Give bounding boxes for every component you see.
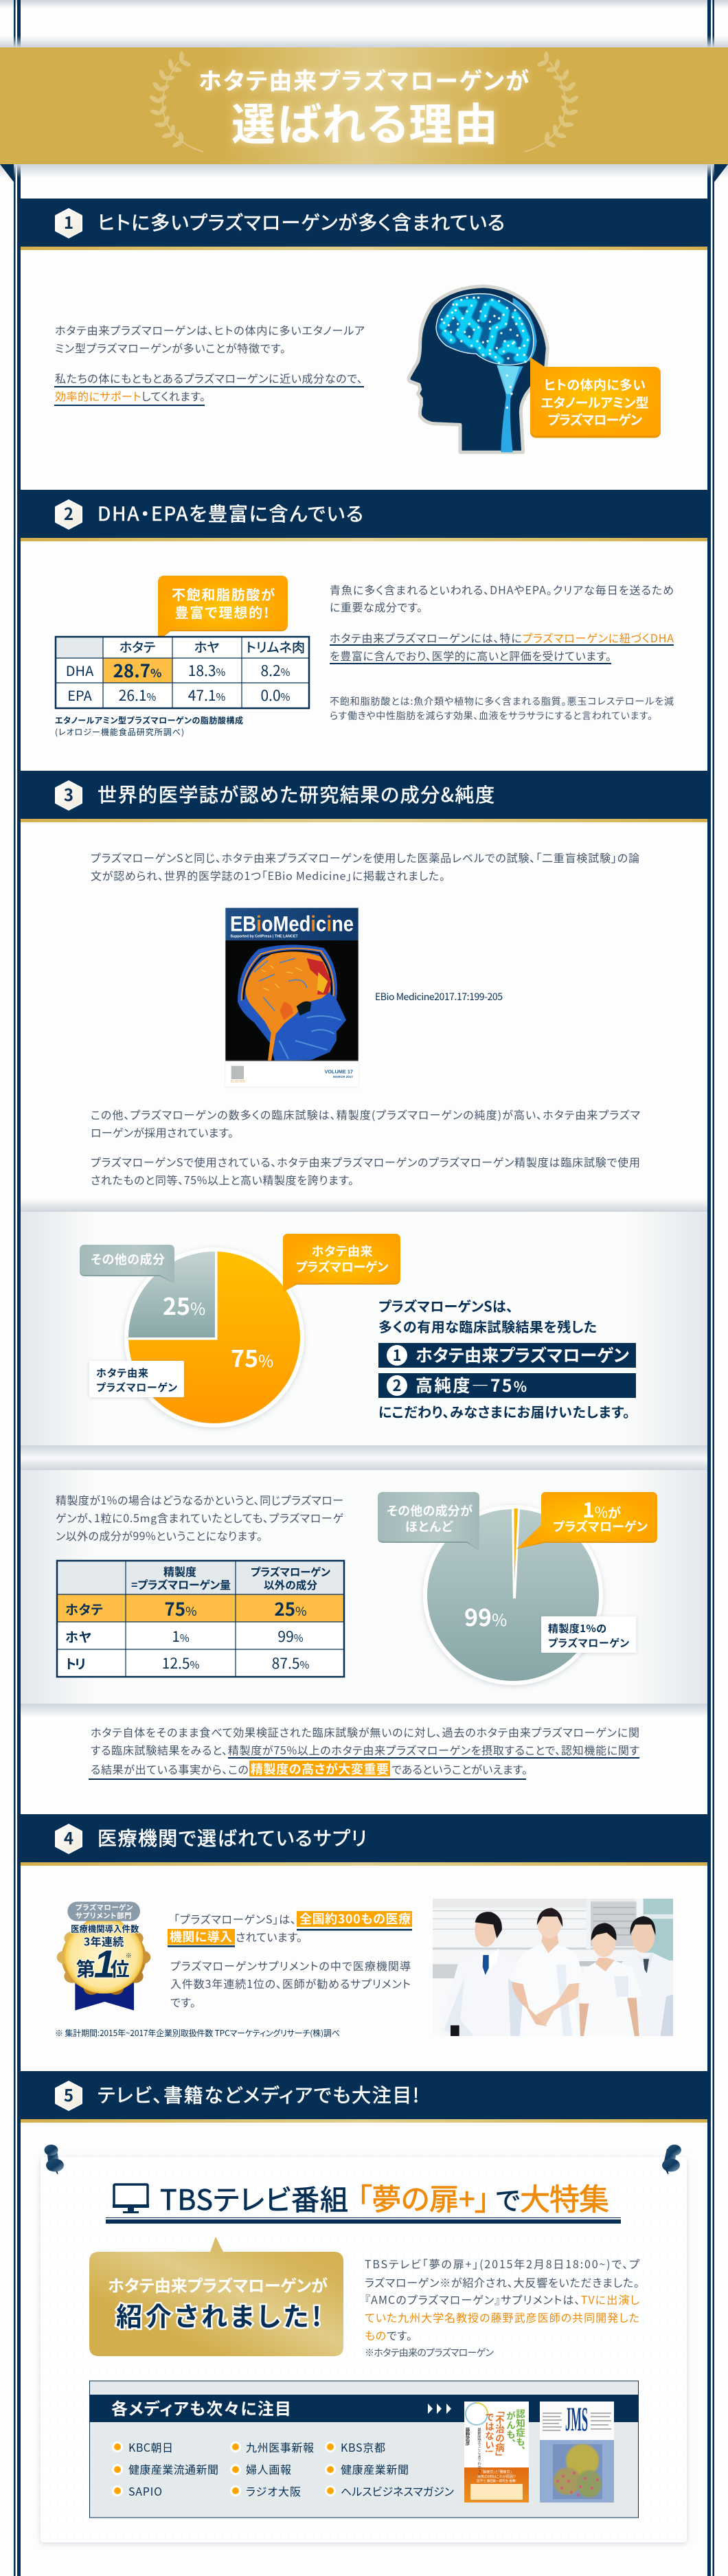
highlight: adopted by 300 institutions: [168, 1910, 412, 1947]
TV programme text: ラズマローゲン※が紹介され、大反響をいただきました。: [365, 2274, 639, 2290]
TV programme text: ていた九州大学名教授の藤野武彦医師の共同開発した: [365, 2309, 639, 2325]
section 1 text: ホタテ由来プラズマローゲンは、ヒトの体内に多いエタノールア: [55, 321, 365, 338]
media list: ラジオ大阪: [246, 2483, 301, 2499]
book cover: JMS magazine: JMS: [565, 2399, 588, 2438]
laurel left: [148, 49, 203, 152]
section 1 text: [54, 321, 365, 406]
panel text: ン以外の成分が99%ということになります。: [56, 1527, 262, 1544]
callout: mostly other ingredients: [378, 1492, 479, 1550]
callout: 1% plasmalogen: 1%が: [582, 1493, 621, 1524]
number badge 2: 2: [64, 501, 73, 525]
table: fatty acid composition: ホヤ: [194, 637, 219, 656]
table: purity by source: プラズマローゲン: [251, 1564, 330, 1579]
card heading: [106, 2175, 621, 2224]
pie chart 99/1: 99%: [464, 1599, 507, 1633]
callout: human body plasmalogen: プラズマローゲン: [547, 410, 642, 429]
callout: human body plasmalogen: エタノールアミン型: [541, 393, 648, 411]
highlight bar 1: 1: [393, 1344, 401, 1366]
badge top pill: サプリメント部門: [76, 1910, 131, 1920]
journal cover: EBioMedicine: ELSEVIER: [231, 1080, 245, 1083]
table: purity by source: =プラズマローゲン量: [131, 1576, 231, 1592]
media list: KBS京都: [341, 2439, 385, 2455]
callout: mostly other ingredients: ほとんど: [405, 1517, 453, 1535]
card heading: TBSテレビ番組: [160, 2177, 348, 2218]
label: 1% plasmalogen: [541, 1616, 636, 1653]
section 3 body text: されたものと同等、75%以上と高い精製度を誇ります。: [91, 1171, 354, 1188]
section 4 text: 「プラズマローゲンS」は、: [174, 1910, 296, 1927]
pie chart 75/25: 25%: [163, 1288, 205, 1322]
book cover: dementia: 医学士 藤田紘一郎先生 推薦!: [477, 2478, 516, 2483]
title banner: [0, 36, 728, 182]
highlight: adopted by 300 institutions: 全国約300もの医療: [299, 1910, 411, 1928]
laurel right: [525, 49, 580, 152]
table: fatty acid composition: 28.7%: [113, 657, 161, 683]
icon: pin right: [662, 2145, 681, 2174]
table: purity by source: 25%: [274, 1596, 307, 1621]
section 3 header: [21, 771, 707, 822]
callout: introduced on TV: ホタテ由来プラズマローゲンが: [108, 2272, 328, 2296]
medal badge: No.1: 第: [76, 1955, 95, 1982]
table caption: エタノールアミン型プラズマローゲンの脂肪酸構成: [55, 714, 243, 726]
number badge 5: [56, 2081, 82, 2110]
table: purity by source: [57, 1561, 344, 1677]
book cover: dementia: 藤野武彦: [464, 2427, 471, 2446]
section 2 header: [21, 490, 707, 541]
highlight: purity importance: 精製度の高さが大変重要: [251, 1760, 389, 1778]
section 1 heading: ヒトに多いプラズマローゲンが多く含まれている: [98, 208, 505, 236]
journal cover: EBioMedicine: EBioMedicine: [230, 912, 354, 936]
callout: unsaturated fatty acids: [158, 576, 288, 641]
illustration: head with glowing brain: [409, 286, 547, 452]
media band heading: 各メディアも次々に注目: [111, 2395, 291, 2419]
card heading: で: [496, 2180, 520, 2217]
media list: 婦人画報: [246, 2461, 291, 2477]
book cover: dementia: 「不治の病」: [493, 2406, 507, 2461]
callout: human body plasmalogen: ヒトの体内に多い: [544, 375, 646, 394]
number badge 1: [56, 209, 82, 238]
label: 1% plasmalogen: 精製度1%の: [548, 1621, 606, 1636]
table: fatty acid composition: EPA: [67, 685, 93, 705]
callout: other ingredients: その他の成分: [91, 1250, 165, 1268]
table: purity by source: 87.5%: [272, 1653, 309, 1673]
table: purity by source: ホヤ: [65, 1627, 91, 1646]
section 3 conclusion text: する臨床試験結果をみると、精製度が75%以上のホタテ由来プラズマローゲンを摂取することで、認知機能に関す: [91, 1741, 639, 1758]
book cover: dementia: 「脳疲労」と「腸疲労」: [481, 2470, 512, 2474]
panel text: 精製度が1%の場合はどうなるかというと、同じプラズマロー: [56, 1491, 343, 1508]
book cover: dementia: 病気の9割はこれが原因!?: [477, 2474, 516, 2479]
section 3 body text: この他、プラズマローゲンの数多くの臨床試験は、精製度(プラズマローゲンの純度)が高い、ホタテ由来プラズマ: [91, 1106, 640, 1122]
table: fatty acid composition: 26.1%: [119, 685, 156, 705]
TV programme text: ものです。: [365, 2327, 412, 2343]
panel: 1% purity comparison: [21, 1457, 707, 1717]
person left: [440, 1912, 524, 2036]
section 2 text: ホタテ由来プラズマローゲンには、特にプラズマローゲンに紐づくDHA: [330, 629, 674, 646]
section 5 heading: テレビ、書籍などメディアでも大注目!: [98, 2081, 419, 2108]
callout: scallop plasmalogen: プラズマローゲン: [295, 1258, 389, 1276]
badge top pill: プラズマローゲン: [76, 1902, 133, 1912]
person third: [579, 1923, 642, 2036]
section 4 text: されています。: [236, 1928, 302, 1945]
table: fatty acid composition: 8.2%: [261, 660, 291, 681]
callout: other ingredients: [80, 1245, 174, 1283]
book cover: dementia: 認知症も、: [514, 2409, 527, 2455]
TV programme text: 『AMCのプラズマローゲン』サプリメントは、TVに出演し: [365, 2291, 639, 2307]
section 2 text: [330, 581, 674, 723]
section 3 heading: 世界的医学誌が認めた研究結果の成分&純度: [98, 780, 494, 808]
section 3 intro text: プラズマローゲンSと同じ、ホタテ由来プラズマローゲンを使用した医薬品レベルでの試験、「二重盲検試験」の論: [91, 849, 639, 866]
label: 1% plasmalogen: プラズマローゲン: [548, 1636, 630, 1650]
panel: 75% purity: [21, 1199, 707, 1459]
callout: unsaturated fatty acids: 豊富で理想的!: [174, 602, 269, 622]
table: fatty acid composition: DHA: [66, 660, 94, 680]
table: fatty acid composition: [56, 637, 309, 708]
table: purity by source: 75%: [164, 1596, 197, 1621]
title line 1: ホタテ由来プラズマローゲンが: [198, 63, 529, 96]
section 3 body text: ローゲンが採用されています。: [91, 1124, 234, 1140]
pie chart 75/25: [124, 1247, 304, 1427]
TV programme text: [365, 2255, 639, 2360]
number badge 3: 3: [64, 782, 73, 806]
number badge 3: [56, 781, 82, 810]
section 1 header: [21, 199, 707, 250]
panel text: ゲンが、1粒に0.5mg含まれていたとしても、プラズマローゲ: [56, 1509, 343, 1526]
book cover: dementia: 最新医学でここまでわかった!: [477, 2428, 482, 2478]
medal badge: No.1: 3年連続: [84, 1933, 124, 1950]
table caption: (レオロジー機能食品研究所調べ): [55, 726, 184, 738]
medal badge: No.1: 位: [111, 1955, 130, 1982]
highlight bar 2: 高純度―75%: [416, 1372, 527, 1397]
panel statement: プラズマローゲンSは、: [378, 1296, 513, 1315]
highlight bar 2: [378, 1372, 636, 1398]
table: purity by source: ホタテ: [65, 1600, 103, 1618]
number badge 1: 1: [64, 210, 73, 234]
section 2 text: に重要な成分です。: [330, 598, 422, 615]
badge top pill: [67, 1901, 140, 1921]
callout: scallop plasmalogen: ホタテ由来: [312, 1242, 372, 1260]
table: purity by source: 12.5%: [162, 1653, 199, 1673]
journal cover: EBioMedicine: [225, 908, 359, 1087]
TV programme text: ※ホタテ由来のプラズマローゲン: [365, 2346, 494, 2360]
number badge 4: 4: [64, 1825, 73, 1849]
media list: 九州医事新報: [246, 2439, 314, 2455]
section 3 conclusion text: ホタテ自体をそのまま食べて効果検証された臨床試験が無いのに対し、過去のホタテ由来プラズマローゲンに関: [91, 1724, 639, 1740]
card heading: 「夢の扉+」: [357, 2176, 490, 2219]
media list: SAPIO: [128, 2483, 162, 2499]
section 4 text: プラズマローゲンサプリメントの中で医療機関導: [170, 1957, 411, 1974]
table caption: [55, 714, 243, 738]
number badge 4: [56, 1824, 82, 1853]
section 3 intro text: [91, 849, 639, 883]
panel statement: にこだわり、みなさまにお届けいたします。: [378, 1401, 630, 1421]
journal cover: EBioMedicine: VOLUME 17: [324, 1068, 353, 1074]
icon: television: [113, 2184, 149, 2213]
section 5 header: [21, 2071, 707, 2123]
callout: introduced on TV: [89, 2237, 343, 2356]
section 2 text: を豊富に含んでおり、医学的に高いと評価を受けています。: [330, 647, 611, 664]
table: fatty acid composition: 47.1%: [188, 685, 225, 705]
section 4 text: [168, 1910, 412, 2010]
journal citation: EBio Medicine2017.17:199-205: [375, 990, 503, 1004]
media list: [112, 2439, 454, 2499]
highlight: adopted by 300 institutions: 機関に導入: [170, 1928, 232, 1945]
pie chart 75/25: 75%: [231, 1340, 273, 1374]
book cover: dementia: がんも、: [504, 2410, 518, 2448]
section 4 text: 入件数3年連続1位の、医師が勧めるサプリメント: [170, 1975, 411, 1991]
icon: pin left: [44, 2145, 64, 2174]
footnote: ※ 集計期間:2015年~2017年企業別取扱件数 TPCマーケティングリサーチ(株)調べ: [55, 2027, 340, 2039]
ribbon fold right: [714, 164, 728, 182]
person second: [510, 1908, 584, 2036]
label: scallop plasmalogen: プラズマローゲン: [96, 1380, 178, 1394]
label: scallop plasmalogen: ホタテ由来: [96, 1366, 148, 1380]
callout: 1% plasmalogen: [516, 1492, 657, 1549]
section 3 body text: プラズマローゲンSで使用されている、ホタテ由来プラズマローゲンのプラズマローゲン精製度は臨床試験で使用: [91, 1153, 640, 1170]
section 2 text: 青魚に多く含まれるといわれる、DHAやEPA。クリアな毎日を送るため: [330, 581, 674, 598]
card heading: 大特集: [520, 2175, 609, 2219]
book cover: dementia: ではない!: [483, 2413, 497, 2453]
section 1 text: 効率的にサポートしてくれます。: [55, 387, 205, 404]
callout: human body plasmalogen: [530, 357, 661, 438]
callout: 1% plasmalogen: プラズマローゲン: [553, 1517, 648, 1535]
medal badge: No.1: ※: [126, 1950, 132, 1960]
TV programme text: TBSテレビ「夢の扉+」(2015年2月8日18:00~)で、プ: [365, 2255, 639, 2272]
section 2 text: 不飽和脂肪酸とは:魚介類や植物に多く含まれる脂質。悪玉コレステロールを減: [330, 694, 674, 708]
ribbon fold left: [0, 164, 14, 182]
highlight bar 2: 2: [393, 1374, 401, 1396]
table: fatty acid composition: 18.3%: [188, 660, 225, 681]
label: scallop plasmalogen: [89, 1361, 184, 1397]
table: fatty acid composition: ホタテ: [120, 637, 155, 656]
journal cover: EBioMedicine: Supported by CellPress | THE LANCET: [230, 935, 298, 939]
callout: introduced on TV: 紹介されました!: [116, 2296, 321, 2334]
section 3 conclusion text: [89, 1724, 639, 1780]
panel: media card: [41, 2145, 687, 2542]
panel text: [56, 1491, 343, 1544]
arrows: [428, 2404, 451, 2414]
medal badge: No.1: [57, 1901, 150, 2011]
highlight bar 1: ホタテ由来プラズマローゲン: [416, 1342, 629, 1367]
section 2 heading: DHA・EPAを豊富に含んでいる: [98, 499, 363, 527]
table: purity by source: トリ: [65, 1654, 86, 1673]
section 3 conclusion text: であるということがいえます。: [391, 1761, 527, 1777]
media list: KBC朝日: [128, 2439, 173, 2455]
section 2 text: らす働きや中性脂肪を減らす効果、血液をサラサラにすると言われています。: [330, 709, 652, 723]
title line 2: 選ばれる理由: [231, 90, 498, 153]
media list: 健康産業流通新聞: [128, 2461, 218, 2477]
panel: other media: [89, 2381, 639, 2518]
callout: unsaturated fatty acids: 不飽和脂肪酸が: [172, 584, 275, 604]
table: purity by source: 精製度: [163, 1563, 196, 1579]
section 4 heading: 医療機関で選ばれているサプリ: [98, 1824, 367, 1851]
callout: scallop plasmalogen: [283, 1234, 400, 1292]
callout: mostly other ingredients: その他の成分が: [387, 1502, 473, 1519]
media list: 健康産業新聞: [341, 2461, 409, 2477]
pie chart 99/1: [423, 1505, 603, 1685]
medal badge: No.1: 医療機関導入件数: [71, 1922, 139, 1934]
panel statement: [378, 1296, 636, 1421]
section 1 text: 私たちの体にもともとあるプラズマローゲンに近い成分なので、: [55, 370, 363, 386]
number badge 5: 5: [64, 2082, 73, 2106]
section 4 text: です。: [170, 1993, 196, 2010]
table: fatty acid composition: トリムネ肉: [246, 637, 305, 656]
person right: [622, 1916, 673, 2036]
number badge 2: [56, 500, 82, 529]
table: purity by source: 1%: [172, 1626, 190, 1647]
table: fatty acid composition: 0.0%: [261, 685, 291, 705]
table: purity by source: 以外の成分: [264, 1577, 317, 1592]
section 3 intro text: 文が認められ、世界的医学誌の1つ「EBio Medicine」に掲載されました。: [91, 867, 445, 883]
media list: ヘルスビジネスマガジン: [341, 2483, 454, 2499]
medal badge: No.1: 1: [94, 1943, 115, 1986]
journal cover: EBioMedicine: MARCH 2017: [333, 1075, 353, 1078]
photo: medical staff: [433, 1899, 673, 2036]
book cover: JMS magazine: [540, 2399, 614, 2502]
section 3 body text: [91, 1106, 640, 1188]
section 4 header: [21, 1814, 707, 1866]
table: purity by source: 99%: [277, 1626, 304, 1647]
section 1 text: ミン型プラズマローゲンが多いことが特徴です。: [55, 339, 286, 356]
panel statement: 多くの有用な臨床試験結果を残した: [378, 1316, 597, 1336]
section 3 conclusion text: る結果が出ている事実から、この: [91, 1761, 249, 1777]
book cover: dementia: [464, 2402, 529, 2502]
